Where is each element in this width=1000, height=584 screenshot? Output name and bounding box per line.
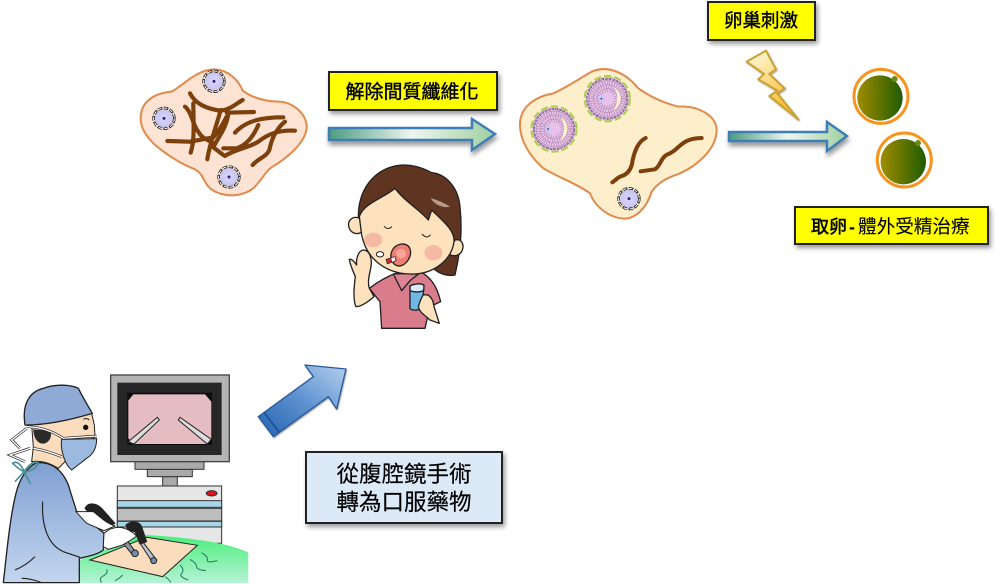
monitor <box>111 375 229 462</box>
label: 解除間質纖維化: 解除間質纖維化 <box>345 81 479 103</box>
cap <box>24 385 92 425</box>
follicle top <box>204 71 224 92</box>
ovary outline <box>520 69 717 219</box>
equipment tower <box>117 462 222 543</box>
mask <box>61 439 97 470</box>
gown folds <box>15 502 80 583</box>
instruments <box>85 504 157 564</box>
bubble <box>376 252 384 257</box>
label: 取卵-體外受精治療: 體外受精治療 <box>858 216 970 237</box>
hair <box>33 429 51 444</box>
skin patch <box>90 537 197 577</box>
gloved hands <box>76 512 115 531</box>
icon: egg lower <box>877 133 931 187</box>
panel: fibrotic ovary <box>141 69 307 195</box>
label: 解除間質纖維化 <box>329 72 497 110</box>
label: 卵巢刺激 <box>708 2 815 40</box>
hand with glass <box>418 295 439 323</box>
label: 取卵-體外受精治療: 取卵 <box>811 217 847 237</box>
icon: lightning bolt <box>747 51 798 119</box>
drape <box>80 535 248 583</box>
shirt <box>369 272 441 328</box>
collar <box>393 273 419 291</box>
mature follicle lower <box>531 106 577 152</box>
gown tie <box>13 462 38 484</box>
pill <box>386 257 396 264</box>
small follicle <box>619 188 639 209</box>
drape folds <box>100 553 217 583</box>
hair back <box>358 165 461 275</box>
follicle left <box>154 108 174 129</box>
arrow: large blue <box>258 365 346 437</box>
label: 卵巢刺激: 卵巢刺激 <box>724 10 798 31</box>
hand on cheek <box>349 250 374 307</box>
arrow: to recovered ovary <box>329 119 495 150</box>
hair highlight <box>431 198 450 207</box>
glass of water <box>410 284 424 310</box>
text box: 從腹腔鏡手術轉為口服藥物 <box>306 452 502 523</box>
remaining fibrosis <box>612 138 702 182</box>
neck and face <box>32 413 95 468</box>
ovary outline <box>141 69 307 195</box>
fibrosis strands <box>167 93 295 165</box>
mouth <box>391 244 411 266</box>
cheeks <box>364 233 382 247</box>
arrow: to eggs <box>729 122 847 151</box>
illustration: woman taking pill <box>349 165 463 328</box>
icon: egg upper <box>854 69 908 123</box>
label: 取卵-體外受精治療 <box>795 207 988 244</box>
illustration: surgeon at laparoscopy monitor <box>3 375 248 583</box>
text box: 從腹腔鏡手術轉為口服藥物: 從腹腔鏡手術 <box>336 462 472 487</box>
face <box>359 188 454 274</box>
eye <box>83 418 89 430</box>
panel: recovered ovary <box>520 69 717 219</box>
ears <box>349 217 362 234</box>
eyes <box>384 226 392 229</box>
text box: 從腹腔鏡手術轉為口服藥物: 轉為口服藥物 <box>336 490 472 515</box>
mask straps <box>10 427 97 462</box>
label: 取卵-體外受精治療: - <box>849 217 855 237</box>
gown <box>3 463 104 583</box>
follicle bottom <box>219 167 239 187</box>
mature follicle upper <box>585 76 630 121</box>
